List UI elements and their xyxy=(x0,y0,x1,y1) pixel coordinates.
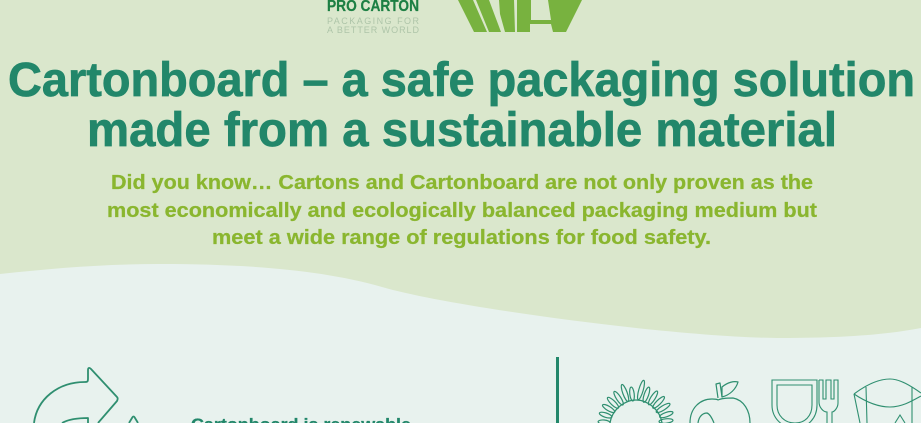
title xyxy=(8,54,915,157)
icon: sun xyxy=(598,380,674,423)
lower wave panel xyxy=(0,264,921,423)
icon: recycling arrows xyxy=(34,368,138,423)
intro text: most economically and ecologically balanced packaging medium but xyxy=(107,200,817,222)
icon: carton box xyxy=(854,379,921,423)
intro text xyxy=(107,172,817,249)
divider xyxy=(556,357,559,423)
icon: apple xyxy=(690,382,750,423)
intro text: meet a wide range of regulations for food safety. xyxy=(212,227,711,249)
icon: plate and fork xyxy=(772,380,838,423)
title: made from a sustainable material xyxy=(87,104,837,157)
logo: MHV xyxy=(458,0,582,32)
title: Cartonboard – a safe packaging solution xyxy=(8,54,915,107)
intro text: Did you know… Cartons and Cartonboard are not only proven as the xyxy=(111,172,813,194)
logo: Pro Carton xyxy=(327,0,420,35)
logo: Pro Carton: A BETTER WORLD xyxy=(327,25,420,35)
logo: Pro Carton: PACKAGING FOR xyxy=(327,16,420,26)
